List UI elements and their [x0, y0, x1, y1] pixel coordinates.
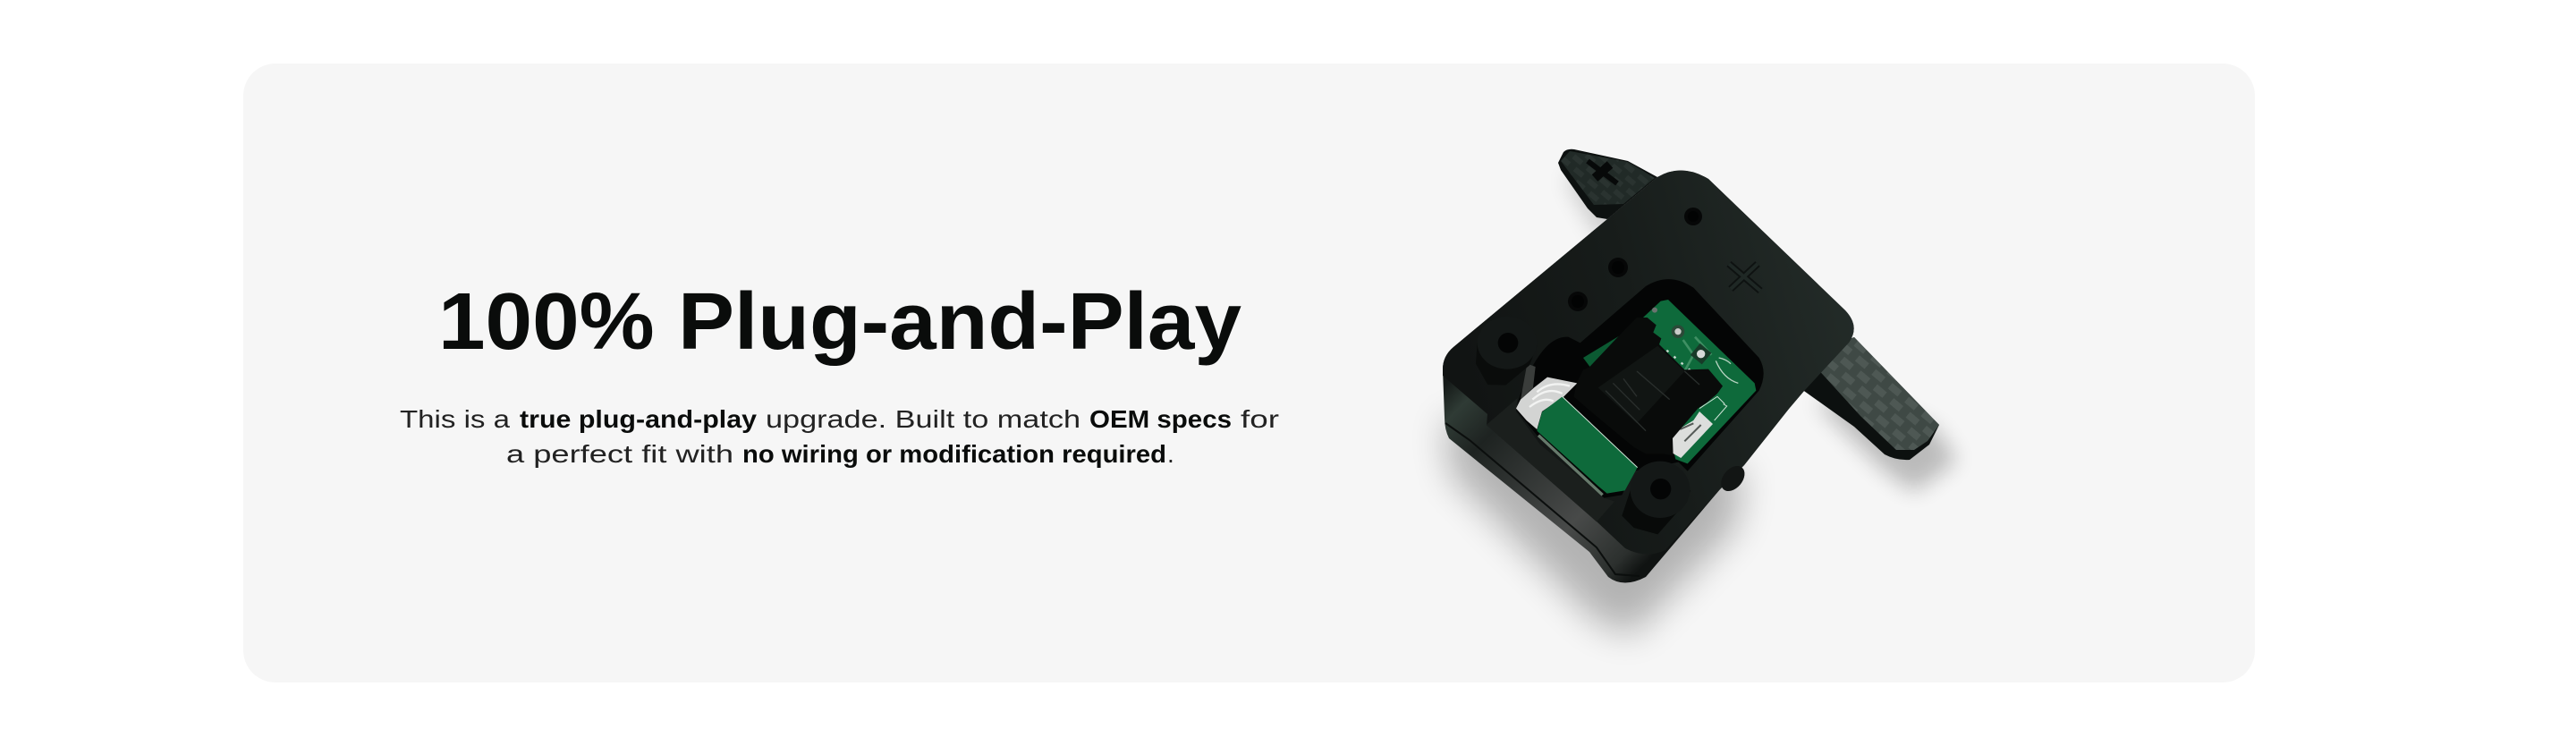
screw hole: left: [1568, 292, 1588, 311]
side button: [1716, 462, 1750, 496]
device body silhouette and side walls: [1443, 170, 1854, 583]
text block: description: .: [1167, 440, 1174, 468]
text block: description: true plug-and-play: [520, 405, 757, 433]
black connector housing: [1573, 318, 1723, 455]
internal components, crop-scaled coordinates: [1476, 279, 1764, 534]
back lever with plus cutout: [1558, 149, 1657, 219]
lower seam line: [1445, 423, 1640, 576]
product photo: plug-and-play paddle module: [1443, 149, 1957, 635]
text block: description: [400, 405, 1279, 468]
right lever with carbon weave: [1789, 337, 1939, 460]
panel: background card: [243, 64, 2255, 682]
silver battery: [1516, 364, 1577, 429]
screw hole: middle: [1608, 258, 1628, 277]
text block: description: for: [1241, 405, 1279, 433]
mounting post: upper left: [1476, 317, 1537, 386]
text block: description: This is a: [400, 405, 511, 433]
mounting post: lower: [1622, 462, 1690, 534]
window cavity: [1516, 279, 1764, 498]
silver contact strip: [1594, 340, 1622, 366]
top face of main block: [1443, 170, 1854, 555]
silver connector pins: [1671, 396, 1724, 458]
lower left slab: [1487, 398, 1614, 521]
drop shadows: [1445, 170, 1957, 635]
text block: description: no wiring or modification required: [742, 440, 1166, 468]
text block: description: upgrade. Built to match: [766, 405, 1080, 433]
text block: description: OEM specs: [1089, 405, 1232, 433]
embossed plus mark: [1729, 264, 1760, 291]
green circuit board: [1537, 300, 1756, 495]
text block: description: a perfect fit with: [506, 440, 733, 468]
screw hole: top: [1684, 208, 1702, 225]
title: 100% Plug-and-Play: [438, 277, 1241, 367]
